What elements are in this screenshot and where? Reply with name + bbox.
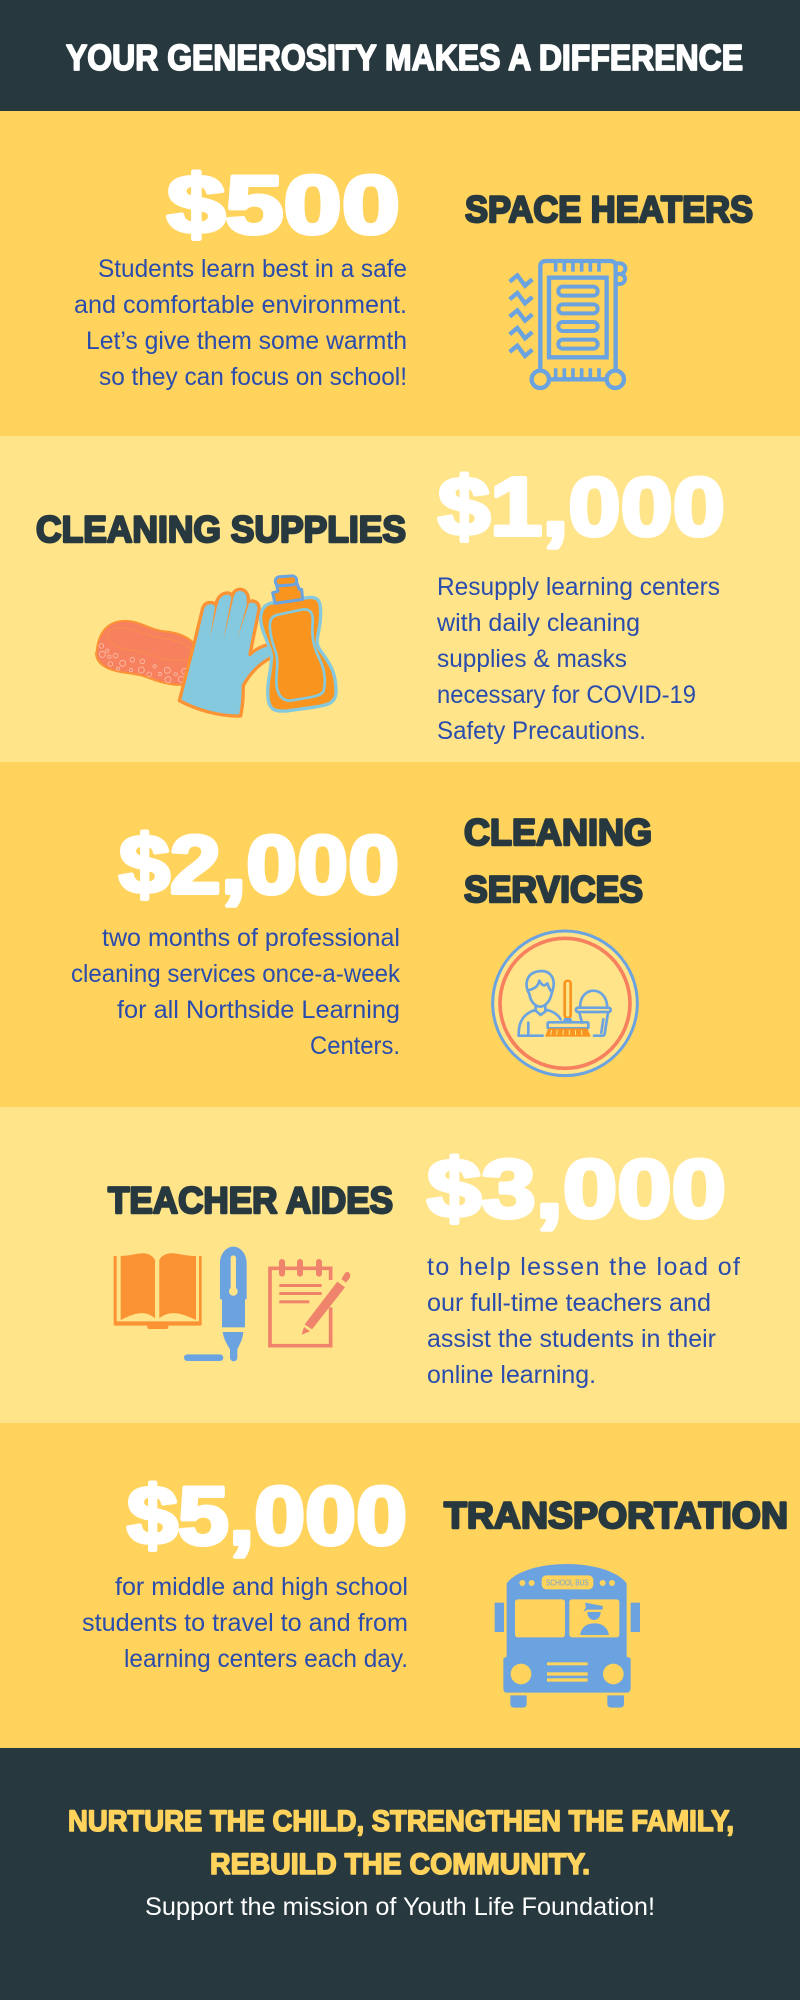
call to action: Support the mission of Youth Life Foundation!	[145, 1893, 655, 1921]
amount: $2,000: $2,000	[119, 818, 399, 911]
icon: cleaner badge	[493, 931, 637, 1076]
description	[427, 1253, 740, 1389]
description: with daily cleaning	[436, 609, 640, 637]
description: online learning.	[427, 1361, 596, 1389]
description: for middle and high school	[115, 1573, 408, 1601]
slogan: NURTURE THE CHILD, STRENGTHEN THE FAMILY,	[68, 1805, 734, 1838]
panel: space heaters	[0, 111, 800, 436]
description: Safety Precautions.	[437, 717, 646, 745]
heading: cleaning services	[464, 812, 652, 910]
description: and comfortable environment.	[74, 291, 407, 319]
panel: header	[0, 0, 800, 111]
amount: $5,000: $5,000	[127, 1469, 407, 1562]
icon: bottle	[261, 576, 336, 711]
panel: cleaning supplies	[0, 436, 800, 762]
description: assist the students in their	[427, 1325, 716, 1353]
slogan: REBUILD THE COMMUNITY.	[210, 1848, 590, 1881]
panel: cleaning services	[0, 762, 800, 1107]
panel: transportation	[0, 1423, 800, 1748]
icon: sponge, glove and bottle	[96, 576, 336, 716]
icon: notepad	[270, 1259, 350, 1346]
description: supplies & masks	[437, 645, 627, 673]
icon: school bus: SCHOOL BUS	[546, 1578, 589, 1587]
description	[71, 924, 400, 1060]
heading: transportation: TRANSPORTATION	[444, 1495, 788, 1536]
description: Let’s give them some warmth	[86, 327, 407, 355]
icons: book, pen and notepad	[114, 1247, 350, 1361]
heading: cleaning supplies: CLEANING SUPPLIES	[36, 509, 406, 550]
amount: $1,000: $1,000	[438, 460, 725, 553]
heading: cleaning services: SERVICES	[464, 869, 643, 910]
description	[436, 573, 720, 745]
amount: $3,000: $3,000	[427, 1142, 726, 1235]
icon: school bus	[495, 1564, 640, 1708]
panel: footer	[0, 1748, 800, 2000]
description: Centers.	[310, 1032, 400, 1060]
description: necessary for COVID-19	[437, 681, 696, 709]
description: for all Northside Learning	[117, 996, 400, 1024]
description: cleaning services once-a-week	[71, 960, 400, 988]
description	[74, 255, 407, 391]
heading: teacher aides: TEACHER AIDES	[108, 1180, 393, 1221]
description: so they can focus on school!	[99, 363, 407, 391]
description: two months of professional	[102, 924, 400, 952]
icon: heater	[510, 261, 625, 388]
description: our full-time teachers and	[427, 1289, 711, 1317]
heading: space heaters: SPACE HEATERS	[465, 189, 753, 230]
description: Students learn best in a safe	[98, 255, 407, 283]
icon: pen	[184, 1247, 247, 1361]
description: Resupply learning centers	[437, 573, 720, 601]
icon: sponge	[96, 621, 198, 685]
description: learning centers each day.	[124, 1645, 408, 1673]
icon: book	[114, 1253, 202, 1329]
heading: cleaning services: CLEANING	[464, 812, 652, 853]
panel: teacher aides	[0, 1107, 800, 1423]
description	[82, 1573, 408, 1673]
description: students to travel to and from	[82, 1609, 408, 1637]
amount: $500: $500	[167, 158, 400, 251]
description: to help lessen the load of	[427, 1253, 740, 1281]
icon: glove	[179, 589, 272, 716]
slogan	[68, 1805, 734, 1881]
